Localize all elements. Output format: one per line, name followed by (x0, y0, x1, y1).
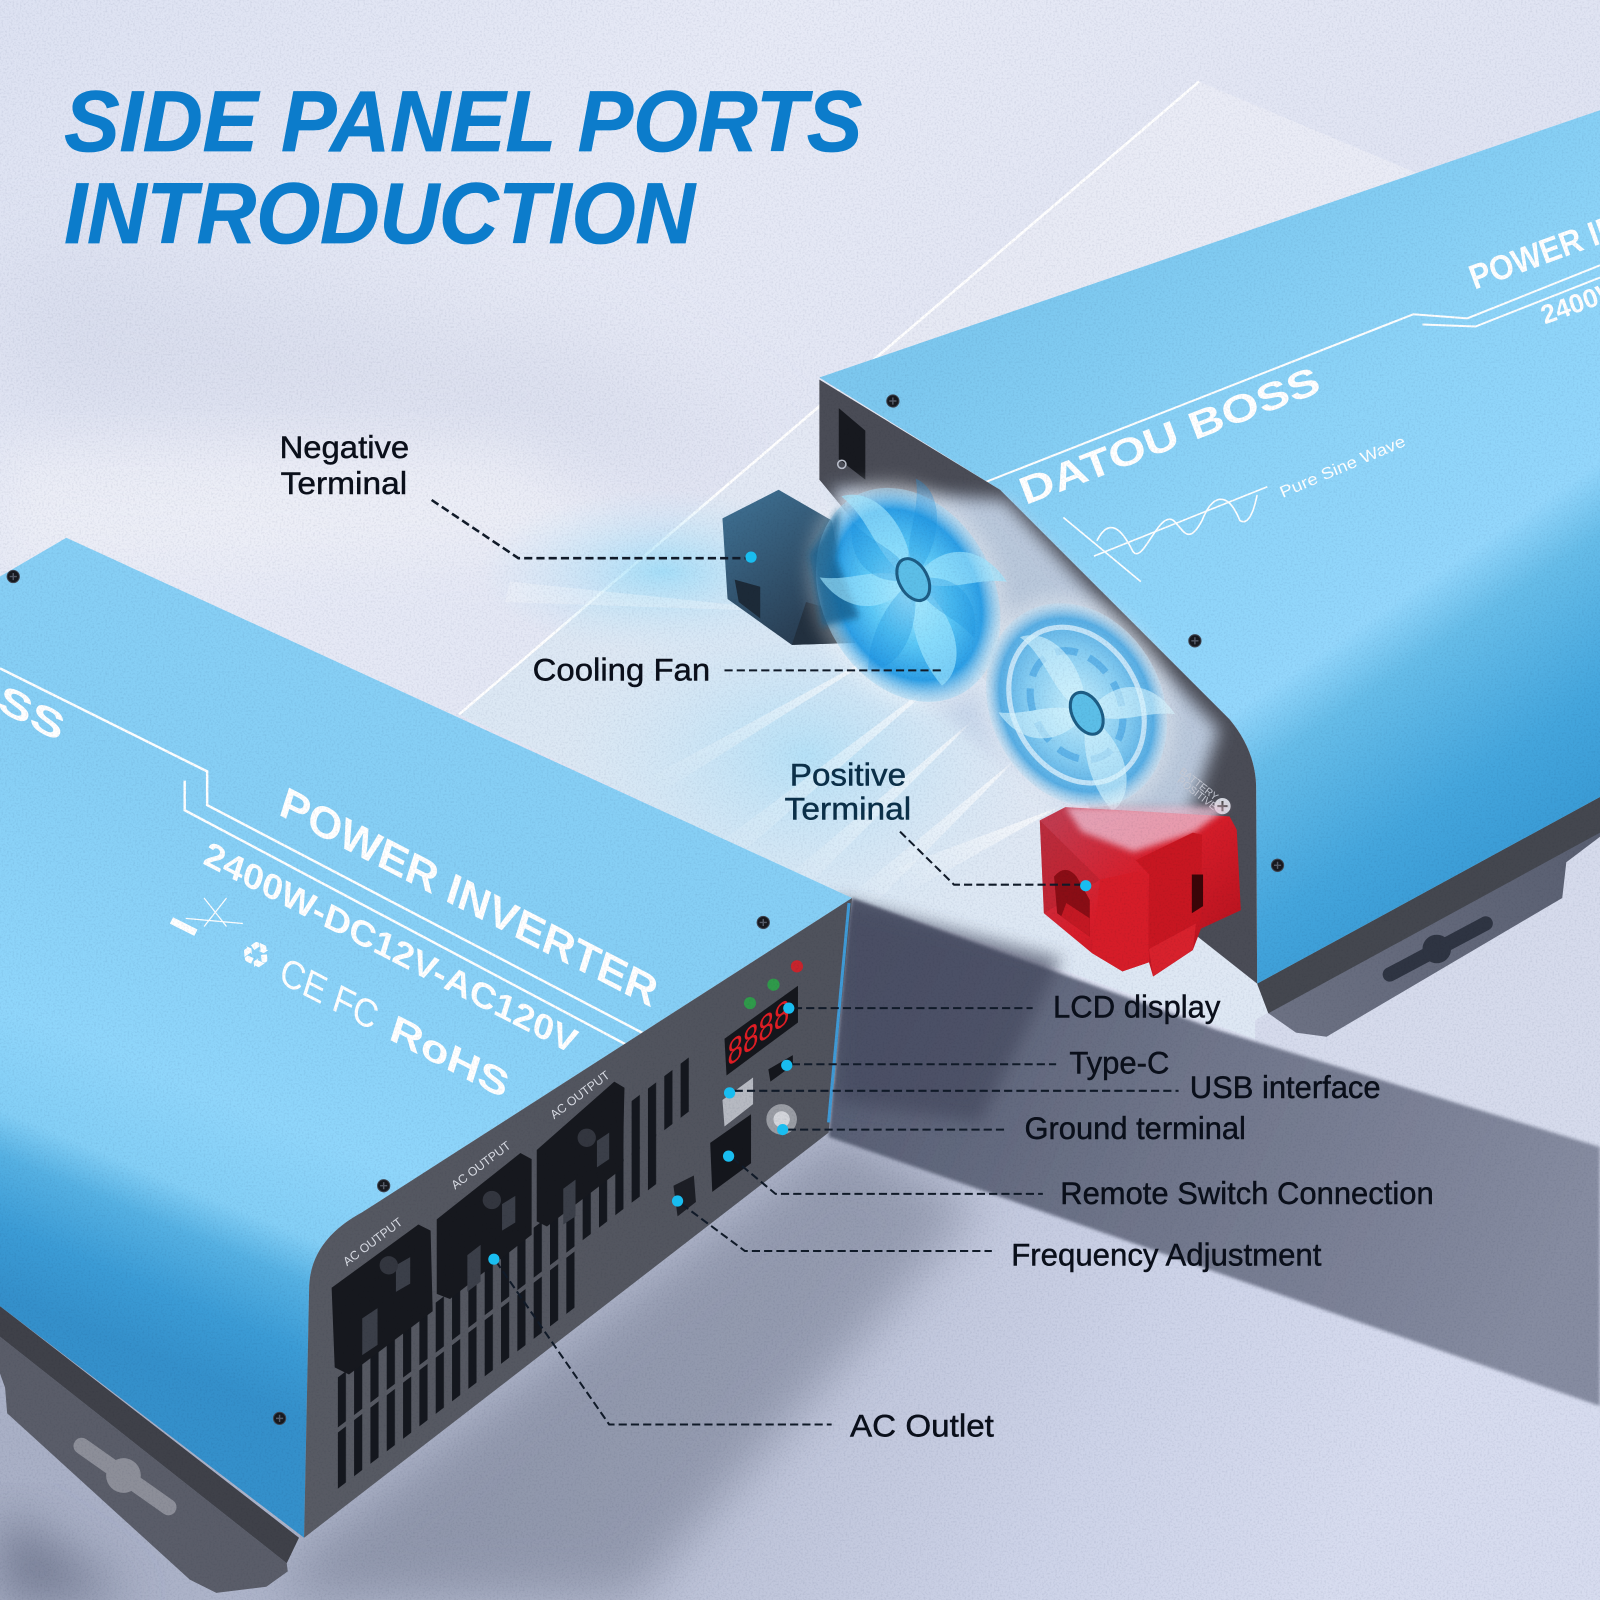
title: SIDE PANEL PORTS (64, 73, 862, 170)
inverter right: blue housing: DATOU BOSS (1013, 359, 1326, 514)
callout: frequency adjustment: Frequency Adjustment (1011, 1236, 1322, 1272)
callout: ground terminal: Ground terminal (1024, 1110, 1246, 1146)
callout: negative terminal (280, 429, 757, 563)
inverter left: dark port panel (304, 898, 852, 1538)
platform step face in shadow (829, 898, 1600, 1406)
inverter right: blue housing (819, 110, 1600, 984)
USB port (722, 1078, 753, 1127)
callout: USB interface (724, 1069, 1381, 1105)
white platform block (459, 82, 1600, 1163)
LCD display: 8888 (728, 991, 789, 1075)
LCD display (724, 960, 803, 1076)
inverter right: dark side panel: BATTERY (1177, 766, 1220, 803)
inverter left: blue housing: RoHS (385, 1006, 514, 1106)
inverter left: blue housing: 2400W-DC12V-AC120V (200, 835, 582, 1062)
callout: Type-C (781, 1044, 1169, 1080)
AC outlet 1: AC OUTPUT (340, 1215, 406, 1269)
callout: positive terminal: Terminal (785, 790, 911, 826)
ventilation slots (338, 1052, 696, 1489)
callout: ground terminal (777, 1110, 1246, 1146)
callout: LCD display (783, 988, 1221, 1024)
airflow from cooling fans (480, 490, 1061, 929)
inverter left: blue housing: CE FC (275, 949, 383, 1039)
callout: frequency adjustment (672, 1195, 1322, 1272)
callout: remote switch connection: Remote Switch Connection (1060, 1175, 1434, 1211)
AC outlet 3 (537, 1068, 624, 1227)
AC outlet 2 (437, 1138, 532, 1299)
remote switch socket (710, 1114, 751, 1192)
title: INTRODUCTION (64, 165, 697, 262)
callout: remote switch connection (723, 1151, 1434, 1211)
callout: USB interface: USB interface (1190, 1069, 1381, 1105)
inverter left: blue housing: ♻ (233, 932, 278, 980)
inverter left: blue housing (0, 538, 852, 1538)
cooling fan 2 (940, 560, 1213, 850)
positive terminal (1040, 806, 1241, 977)
callout: AC outlet (488, 1254, 994, 1444)
inverter right: metal bracket (1257, 797, 1600, 1037)
title (64, 73, 862, 262)
inverter left: metal bracket (0, 1306, 299, 1593)
inverter left: blue housing: POWER INVERTER (275, 778, 663, 1017)
housing print (0, 668, 646, 1047)
callout: cooling fan: Cooling Fan (533, 652, 710, 688)
AC outlet 2: AC OUTPUT (448, 1138, 514, 1192)
callout: positive terminal: Positive (790, 757, 906, 793)
ground terminal (766, 1104, 797, 1135)
inverter right: blue housing: Pure Sine Wave (1277, 432, 1408, 502)
Type-C port (768, 1055, 793, 1082)
callout: negative terminal: Negative (280, 429, 409, 465)
negative terminal (722, 490, 855, 645)
callout: LCD display: LCD display (1053, 988, 1221, 1024)
cooling fan 1 (749, 415, 1077, 745)
AC outlet 3: AC OUTPUT (547, 1068, 613, 1122)
AC outlet 1 (332, 1215, 433, 1374)
callout: negative terminal: Terminal (281, 465, 407, 501)
inverter right: dark side panel (819, 380, 1257, 984)
callout: AC outlet: AC Outlet (850, 1408, 994, 1444)
housing logo and print (968, 265, 1600, 582)
callout: Type-C: Type-C (1069, 1044, 1169, 1080)
frequency switch (673, 1176, 696, 1216)
inverter right: dark side panel: POSITIVE (1175, 775, 1219, 813)
callout: positive terminal (785, 757, 1091, 891)
